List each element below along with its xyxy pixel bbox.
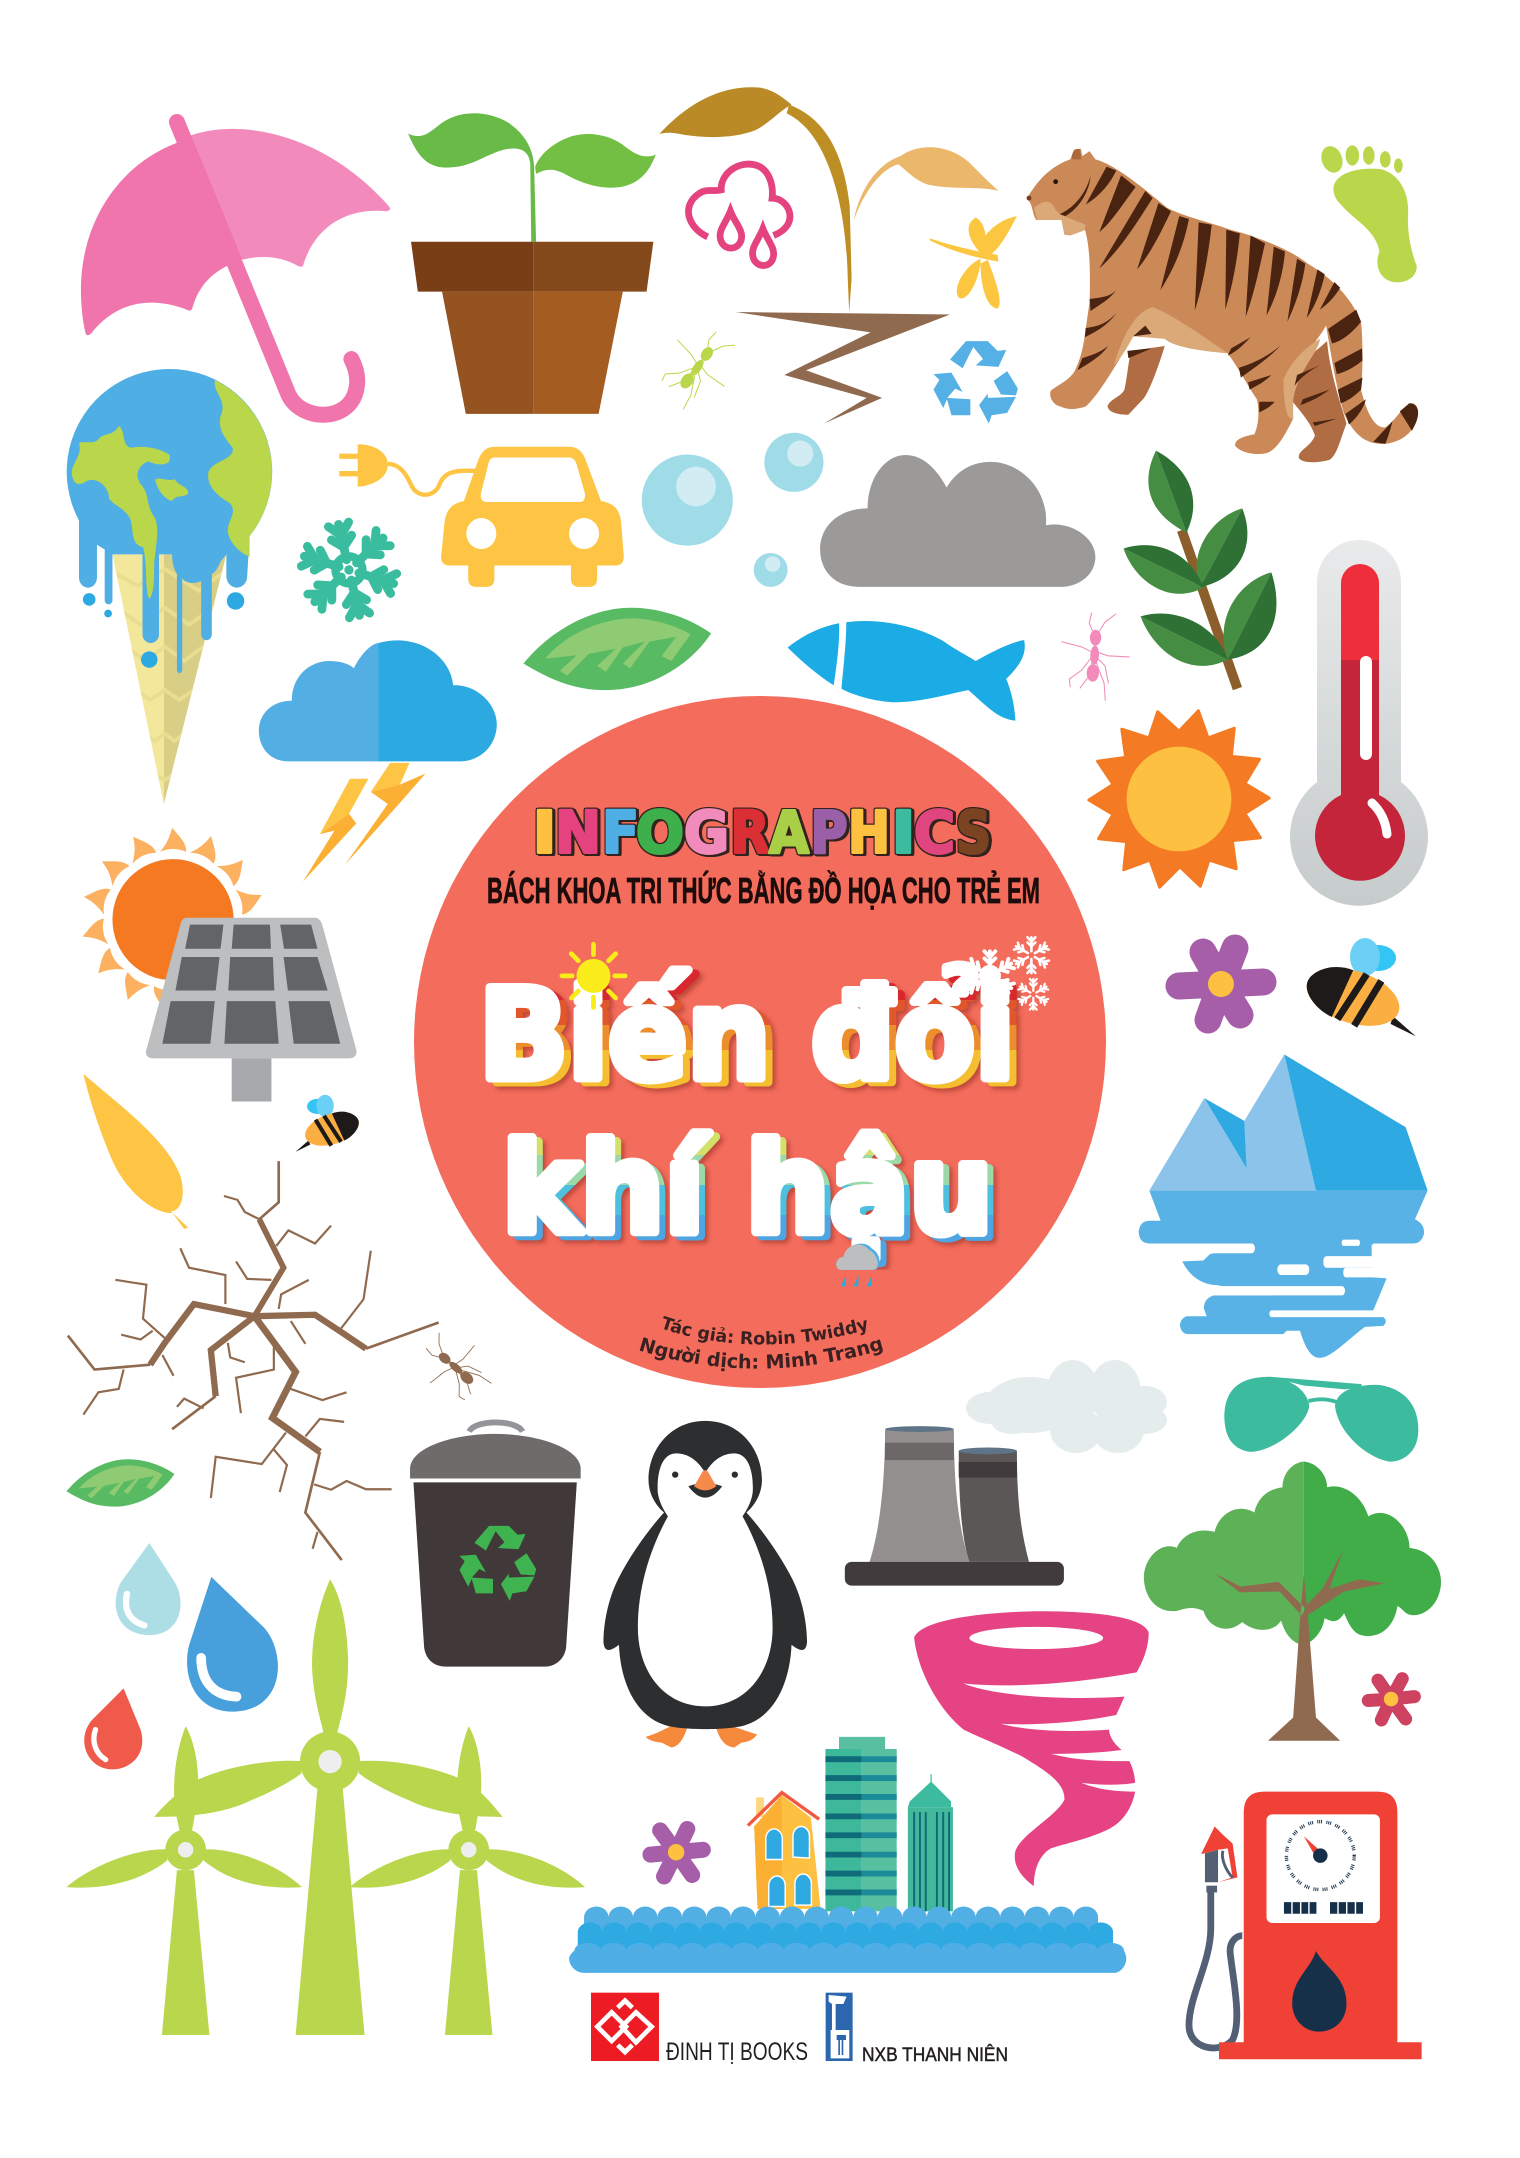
icon: orange sun <box>1089 711 1269 887</box>
text: author: Tác giả: Robin Twiddy <box>663 1316 867 1345</box>
text: translator: Người dịch: Minh Trang <box>640 1337 883 1372</box>
left turbine <box>66 1726 302 2035</box>
icon: penguin <box>603 1421 807 1748</box>
icon: yellow leaf <box>83 1074 188 1229</box>
icon: thermometer <box>1290 540 1428 906</box>
icon: trash bin <box>410 1422 581 1667</box>
icon: small green leaf <box>66 1459 174 1507</box>
icon: small rain cloud on title <box>836 1244 880 1286</box>
icon: solar panel and sun <box>80 828 356 1101</box>
icon: blue recycling symbol <box>934 341 1018 424</box>
heading: INFOGRAPHICS multicolour letters: I <box>892 798 916 866</box>
icon: pink tornado <box>914 1611 1149 1886</box>
icon: dragonfly <box>930 216 1017 309</box>
icon: white snowflakes on title <box>966 937 1049 1010</box>
panel: central coral title circle <box>414 696 1106 1388</box>
heading: INFOGRAPHICS multicolour letters: A <box>769 798 809 866</box>
heading: INFOGRAPHICS multicolour letters: O <box>636 798 684 866</box>
heading: INFOGRAPHICS multicolour letters <box>532 798 991 866</box>
icon: rain cloud outline <box>688 164 790 266</box>
icon: small bee <box>288 1095 363 1157</box>
icon: cracked ground <box>68 1161 439 1560</box>
heading: INFOGRAPHICS multicolour letters: H <box>848 798 890 866</box>
icon: electric car and plug <box>339 444 624 587</box>
icon: green leaf <box>523 608 711 690</box>
icon: wind turbines <box>66 1579 585 2035</box>
icon: green branch <box>1124 451 1276 689</box>
icon: grey cloud <box>820 455 1095 587</box>
heading: INFOGRAPHICS multicolour letters: S <box>956 798 991 866</box>
heading: INFOGRAPHICS multicolour letters: I <box>532 798 556 866</box>
icon: wilted plant on cracked ground <box>659 87 998 424</box>
small tower <box>908 1774 953 1911</box>
heading: INFOGRAPHICS multicolour letters: C <box>914 798 955 866</box>
large turbine <box>154 1579 503 2035</box>
logo: NXB Thanh Nien <box>826 1993 1008 2066</box>
icon: teal snowflake <box>294 514 404 626</box>
heading: INFOGRAPHICS multicolour letters: F <box>602 798 639 866</box>
icon: flooded city <box>748 1737 953 1911</box>
icon: water drops <box>84 1543 278 1769</box>
icon: light cloud <box>966 1360 1167 1453</box>
heading: INFOGRAPHICS multicolour letters: G <box>684 798 729 866</box>
logo: NXB Thanh Nien: NXB THANH NIÊN <box>862 2044 1008 2066</box>
icon: red flower <box>1368 1679 1414 1720</box>
icon: pink ant <box>1058 611 1132 702</box>
icon: sunglasses <box>1224 1377 1418 1462</box>
icon: large bee <box>1299 938 1430 1045</box>
heading: INFOGRAPHICS multicolour letters: R <box>730 798 770 866</box>
icon: power plant cooling towers <box>845 1426 1064 1586</box>
icon: purple flower <box>1179 948 1263 1020</box>
icon: lime ant <box>647 316 747 421</box>
icon: bubbles <box>642 433 823 587</box>
main title line 1: Biến đổi <box>479 964 1015 1108</box>
logo: Dinh Ti Books <box>591 1993 808 2066</box>
icon: iceberg <box>1139 1054 1428 1358</box>
tall building <box>825 1737 897 1911</box>
icon: blue storm cloud <box>259 640 497 761</box>
heading: INFOGRAPHICS multicolour letters: N <box>555 798 601 866</box>
icon: red fuel pump <box>1189 1792 1422 2059</box>
icon: melting earth ice cream <box>67 369 272 804</box>
icon: brown ant <box>411 1323 503 1413</box>
icon: pink umbrella <box>81 122 390 415</box>
main title line 2: khí hậu <box>502 1118 993 1262</box>
heading: INFOGRAPHICS multicolour letters: P <box>810 798 848 866</box>
icon: green tree <box>1144 1462 1441 1741</box>
subtitle: BÁCH KHOA TRI THỨC BẰNG ĐỒ HỌA CHO TRẺ EM <box>487 869 1040 911</box>
icon: yellow sun on title <box>562 944 625 1007</box>
house <box>748 1793 821 1909</box>
icon: small purple flower <box>650 1829 703 1876</box>
icon: green footprint <box>1318 143 1417 282</box>
icon: tiger <box>1027 149 1418 462</box>
ice cream cone <box>107 554 228 804</box>
icon: blue fish <box>788 621 1025 721</box>
right turbine <box>349 1726 585 2035</box>
logo: Dinh Ti Books: ĐINH TỊ BOOKS <box>666 2038 808 2066</box>
icon: seedling in pot <box>408 113 656 414</box>
icon: flood water waves <box>569 1907 1126 1973</box>
icon: lightning bolts <box>303 763 426 882</box>
sun rays <box>80 828 266 1013</box>
